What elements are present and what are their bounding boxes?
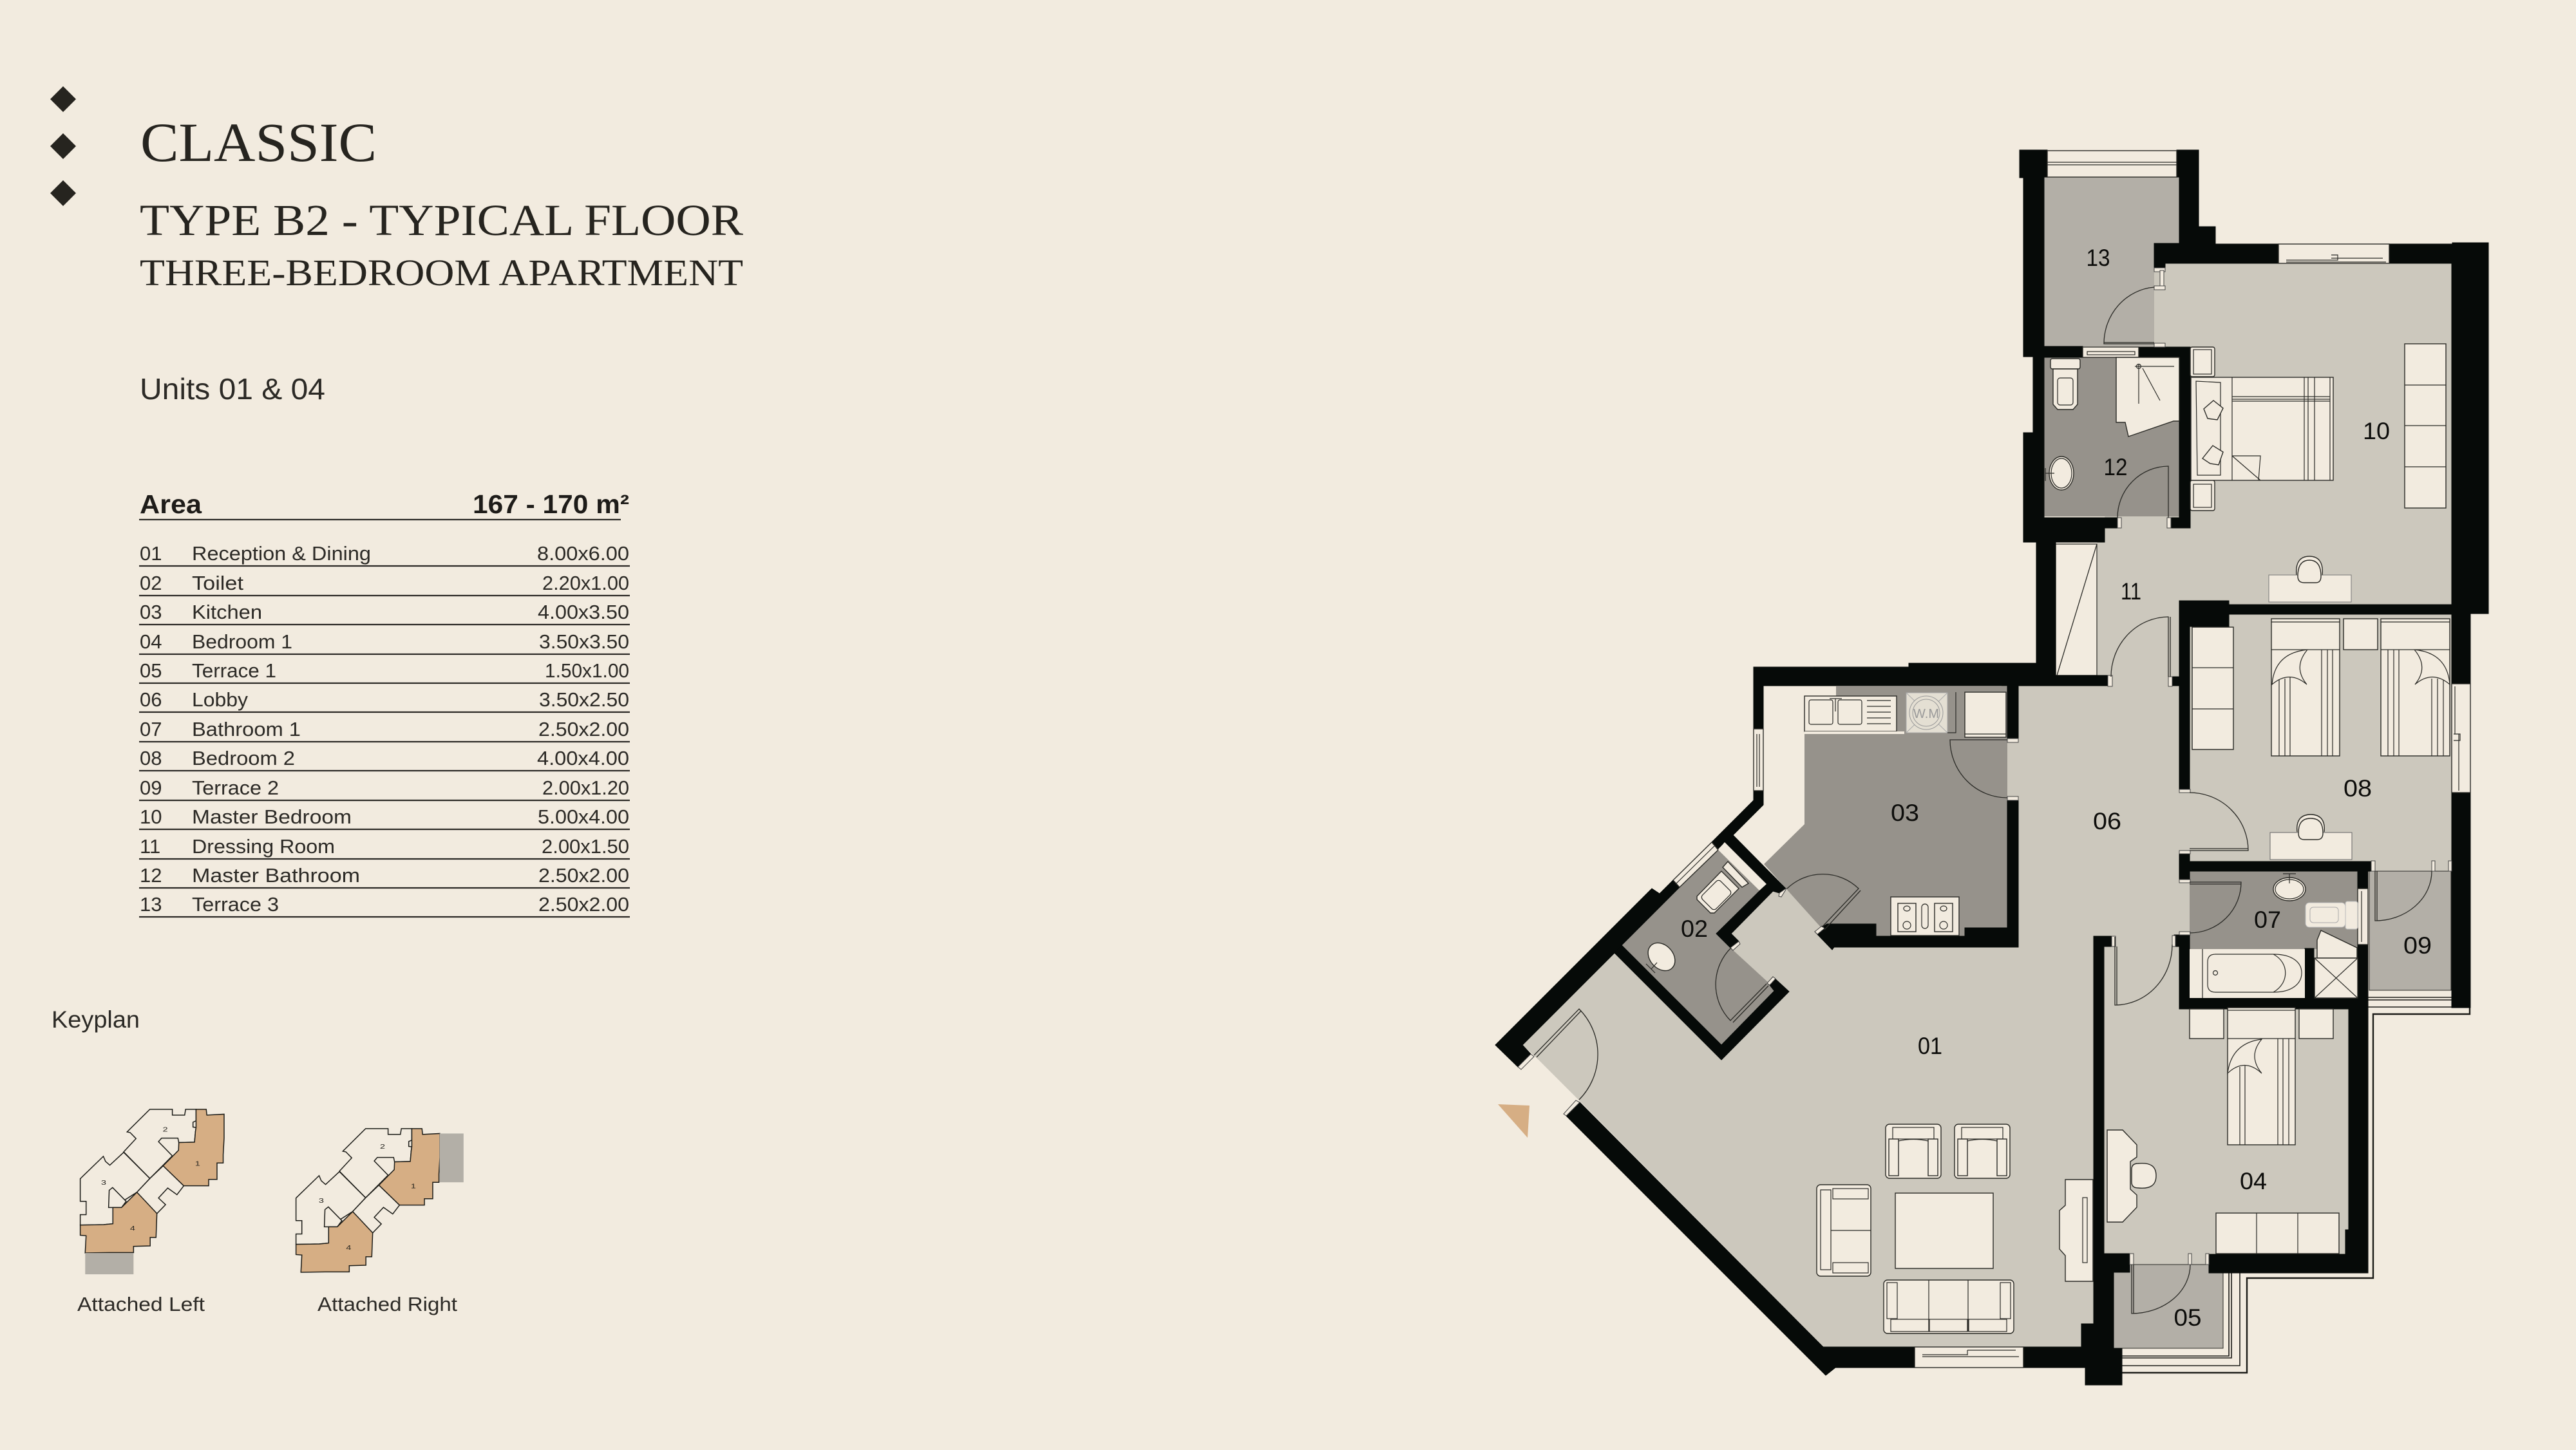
washing machine: W.M: [1913, 707, 1939, 721]
floor: toilet 02: [1622, 849, 1774, 1045]
row 01: Reception & Dining: [192, 542, 371, 565]
label 08: 08: [2344, 775, 2372, 802]
sink counter: [1804, 696, 1904, 734]
row 03: 03: [140, 601, 162, 623]
row 12: 12: [140, 864, 162, 887]
row 09: Terrace 2: [192, 777, 279, 799]
basin: [2045, 457, 2074, 490]
floor plan: [1495, 150, 2488, 1385]
row 13: Terrace 3: [192, 893, 279, 916]
table heading: Area: [140, 489, 202, 519]
nightstand: [2344, 619, 2378, 650]
cream strip: [1718, 842, 1766, 890]
furniture: bedroom 08: [2192, 619, 2450, 860]
row 07: 07: [140, 718, 162, 740]
floor: terrace 09: [2369, 871, 2451, 990]
row 13: 2.50x2.00: [538, 893, 629, 916]
chair: [2132, 1163, 2156, 1188]
row 12: Master Bathroom: [192, 864, 360, 887]
furniture: kitchen 03: [1804, 692, 2006, 936]
keyplan: attached left: [80, 1109, 224, 1274]
basin: [2273, 874, 2306, 901]
desk: [2269, 575, 2351, 602]
terrace railings: [2122, 997, 2470, 1373]
row 08: 4.00x4.00: [537, 747, 629, 769]
floor: kitchen 03: [1764, 686, 2007, 936]
keyplan: attached right: 3: [319, 1197, 324, 1205]
row 10: [139, 805, 630, 829]
heading: keyplan: Keyplan: [52, 1006, 140, 1033]
row 06: 3.50x2.50: [539, 688, 629, 711]
label 03: 03: [1891, 800, 1919, 826]
row 07: Bathroom 1: [192, 718, 301, 740]
keyplan: attached right: 2: [380, 1143, 385, 1150]
row 06: 06: [140, 688, 162, 711]
armchair 2: [1955, 1124, 2010, 1178]
row 07: 2.50x2.00: [538, 718, 629, 740]
label 13: 13: [2087, 245, 2110, 271]
row 10: 5.00x4.00: [538, 805, 629, 828]
floor: cream storage: [1733, 686, 1836, 864]
row 04: 04: [140, 630, 162, 653]
basin: [1643, 937, 1680, 976]
keyplan: attached right: 4: [346, 1244, 351, 1252]
desk: [2107, 1130, 2137, 1222]
toilet: [2306, 901, 2358, 929]
floor: bathroom 07: [2190, 871, 2358, 949]
icon: three diamonds: [50, 86, 76, 206]
floor: master bathroom 12: [2044, 357, 2179, 516]
row 02: Toilet: [192, 572, 243, 594]
row 09: 2.00x1.20: [542, 777, 629, 799]
wardrobe: [2192, 627, 2233, 749]
label 06: 06: [2093, 808, 2121, 834]
toilet: [2050, 359, 2080, 410]
chair: [2297, 556, 2322, 583]
keyplan: attached left: 1: [195, 1160, 200, 1167]
table heading: [139, 489, 629, 520]
armchair 1: [1886, 1124, 1941, 1178]
floor: terrace 05: [2114, 1265, 2223, 1348]
row 01: 01: [140, 542, 162, 565]
room labels: [1681, 245, 2432, 1331]
nightstand top: [2190, 347, 2215, 377]
windows: [1673, 151, 2470, 1368]
desk: [2270, 833, 2352, 860]
keyplan: attached right: [296, 1129, 464, 1272]
row 09: 09: [140, 777, 162, 799]
keyplan: attached left: 4: [130, 1225, 135, 1232]
row 05: 1.50x1.00: [545, 659, 629, 682]
furniture: reception 01: [1817, 1124, 2093, 1333]
tv unit: [2060, 1180, 2093, 1281]
label 11: 11: [2121, 578, 2141, 605]
label 04: 04: [2240, 1168, 2267, 1194]
row 12: [139, 864, 630, 888]
bathtub: [2190, 949, 2305, 998]
panel: area table: [139, 489, 630, 917]
row 01: 8.00x6.00: [537, 542, 629, 565]
floor: wardrobe room 11: [2056, 544, 2097, 675]
single bed: [2228, 1008, 2295, 1145]
row 11: Dressing Room: [192, 835, 335, 858]
row 06: Lobby: [192, 688, 249, 711]
row 13: [139, 893, 630, 917]
label 07: 07: [2254, 907, 2281, 933]
furniture: master bedroom 10: [2190, 344, 2446, 602]
floor: lobby threshold at kitchen door: [2007, 739, 2020, 800]
single bed right: [2381, 619, 2450, 756]
doors: [1534, 287, 2432, 1313]
toilet: [1697, 862, 1748, 913]
row 04: Bedroom 1: [192, 630, 292, 653]
label 12: 12: [2103, 454, 2128, 480]
row 03: 4.00x3.50: [538, 601, 629, 623]
row 08: [139, 747, 630, 771]
icon: orientation triangle: [1498, 1104, 1530, 1138]
fridge: [1965, 692, 2006, 737]
coffee table: [1895, 1193, 1993, 1268]
floor: living rooms: [1522, 261, 2454, 1349]
shower: [2315, 930, 2358, 998]
row 02: 2.20x1.00: [542, 572, 629, 594]
row 03: Kitchen: [192, 601, 262, 623]
row 07: [139, 718, 630, 742]
row 06: [139, 688, 630, 712]
chair: [2297, 814, 2324, 840]
row 04: [139, 630, 630, 654]
row 13: 13: [140, 893, 162, 916]
wardrobe: [2216, 1213, 2339, 1254]
row 05: Terrace 1: [192, 659, 276, 682]
title: CLASSIC: [140, 111, 377, 173]
heading: type: TYPE B2 - TYPICAL FLOOR: [140, 196, 743, 245]
door jambs: [1518, 268, 2452, 1265]
wardrobe: [2405, 344, 2446, 508]
sofa left: [1817, 1185, 1871, 1276]
label 01: 01: [1918, 1033, 1942, 1059]
nightstand bottom: [2190, 480, 2215, 511]
table heading: 167 - 170 m²: [473, 489, 629, 519]
single bed left: [2271, 619, 2340, 756]
double bed: [2191, 377, 2333, 480]
label 09: 09: [2403, 932, 2432, 959]
row 08: Bedroom 2: [192, 747, 295, 769]
washing machine: [1906, 692, 1956, 733]
nightstand left: [2190, 1009, 2224, 1039]
row 11: 11: [140, 835, 160, 858]
label: attached right: Attached Right: [317, 1293, 457, 1315]
row 05: [139, 659, 630, 683]
furniture: toilet 02: [1643, 842, 1766, 976]
row 11: [139, 835, 630, 859]
label: attached left: Attached Left: [77, 1293, 205, 1315]
furniture: bathroom 07: [2190, 874, 2358, 998]
text: units: Units 01 & 04: [140, 372, 325, 406]
row 10: 10: [140, 805, 162, 828]
row 03: [139, 601, 630, 625]
floor: terrace 13: [2044, 177, 2179, 346]
keyplan: attached right: 1: [411, 1182, 416, 1190]
sofa bottom: [1884, 1280, 2014, 1333]
heading: apartment: THREE-BEDROOM APARTMENT: [140, 252, 743, 294]
nightstand right: [2299, 1009, 2333, 1039]
furniture: bedroom 04: [2107, 1008, 2339, 1254]
shower: [2116, 357, 2179, 437]
row 01: [139, 542, 630, 566]
label 10: 10: [2363, 418, 2390, 444]
row 02: [139, 572, 630, 596]
keyplan: attached left: 2: [163, 1125, 168, 1133]
row 11: 2.00x1.50: [542, 835, 629, 858]
row 12: 2.50x2.00: [538, 864, 629, 887]
label 05: 05: [2174, 1304, 2201, 1331]
furniture: master bathroom 12: [2045, 357, 2179, 490]
row 02: 02: [140, 572, 162, 594]
walls: [1495, 150, 2488, 1385]
cooker: [1891, 897, 1959, 936]
row 05: 05: [140, 659, 162, 682]
row 09: [139, 777, 630, 800]
keyplan: attached left: 3: [101, 1179, 106, 1186]
row 10: Master Bedroom: [192, 805, 352, 828]
label 02: 02: [1681, 916, 1708, 942]
row 04: 3.50x3.50: [539, 630, 629, 653]
row 08: 08: [140, 747, 162, 769]
